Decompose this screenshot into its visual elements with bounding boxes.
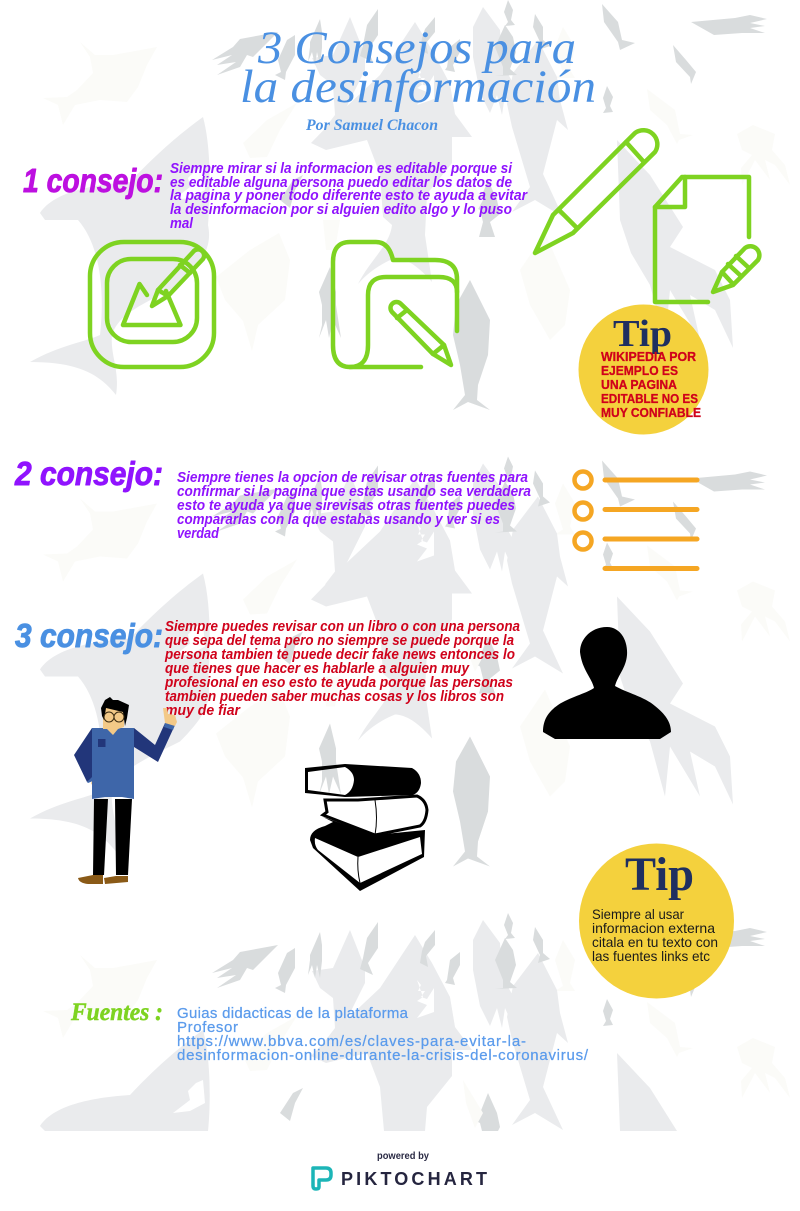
callout: tip Wikipedia: EJEMPLO ES — [601, 363, 678, 378]
text block: consejo 3: que sepa del tema pero no siempre se puede porque la — [165, 632, 514, 649]
icon: document with pencil — [655, 177, 759, 302]
icon: folder with pencil — [333, 242, 457, 367]
text block: sources: Guias didacticas de la plataforma — [177, 1005, 409, 1022]
text block: consejo 2 — [177, 469, 531, 542]
text block: sources: https://www.bbva.com/es/claves-para-evitar-la- — [177, 1033, 526, 1050]
text block: consejo 2: confirmar si la pagina que estas usando sea verdadera — [177, 483, 531, 500]
footer: powered by Piktochart — [313, 1151, 487, 1189]
text block: consejo 3: Siempre puedes revisar con un libro o con una persona — [165, 618, 520, 635]
text block: consejo 2: compararlas con la que estabas usando y ver si es — [177, 511, 500, 528]
footer: powered by Piktochart: PIKTOCHART — [341, 1169, 487, 1189]
title: la desinformación — [240, 61, 596, 113]
text block: consejo 1: es editable alguna persona puedo editar los datos de — [170, 174, 512, 191]
text block: consejo 2: esto te ayuda ya que sirevisas otras fuentes puedes — [177, 497, 515, 514]
callout: tip citation: Tip — [625, 848, 694, 901]
icon: stack of books — [305, 764, 427, 891]
callout: tip Wikipedia: MUY CONFIABLE — [601, 405, 701, 420]
icon: large pencil — [535, 130, 657, 253]
icon: person silhouette — [543, 627, 671, 739]
callout: tip citation: informacion externa — [592, 920, 715, 936]
heading: 1 consejo: 1 consejo: — [23, 162, 163, 199]
heading: Fuentes: Fuentes : — [70, 999, 163, 1026]
callout: tip Wikipedia: EDITABLE NO ES — [601, 391, 698, 406]
text block: consejo 1 — [170, 160, 528, 232]
text block: consejo 1: Siempre mirar si la informacion es editable porque si — [170, 160, 513, 177]
callout: tip Wikipedia — [578, 304, 708, 434]
text block: consejo 2: Siempre tienes la opcion de revisar otras fuentes para — [177, 469, 528, 486]
callout: tip citation: las fuentes links etc — [592, 948, 710, 964]
text block: consejo 3: tambien pueden saber muchas cosas y los libros son — [165, 688, 504, 705]
callout: tip citation — [579, 844, 734, 998]
text block: sources: desinformacion-online-durante-la-crisis-del-coronavirus/ — [177, 1047, 589, 1064]
title: 3 Consejos para — [257, 22, 576, 74]
text block: sources: Profesor — [177, 1019, 238, 1036]
callout: tip Wikipedia: WIKIPEDIA POR — [601, 349, 697, 364]
illustration: man pointing up — [74, 697, 177, 884]
subtitle: author: Por Samuel Chacon — [305, 117, 438, 134]
footer: powered by Piktochart: powered by — [377, 1151, 429, 1162]
text block: consejo 3: profesional en eso esto te ayuda porque las personas — [164, 674, 513, 691]
callout: tip citation: citala en tu texto con — [592, 934, 718, 950]
icon: edit square — [90, 242, 214, 367]
text block: consejo 1: mal — [170, 215, 194, 232]
callout: tip citation: Siempre al usar — [592, 906, 684, 922]
text block: sources — [177, 1005, 589, 1064]
callout: tip Wikipedia: Tip — [613, 313, 672, 355]
text block: consejo 3: que tienes que hacer es hablarle a alguien muy — [165, 660, 470, 677]
text block: consejo 3: persona tambien te puede decir fake news entonces lo — [164, 646, 515, 663]
title — [240, 22, 596, 113]
icon: checklist — [574, 472, 697, 568]
text block: consejo 3 — [164, 618, 520, 719]
callout: tip Wikipedia: UNA PAGINA — [601, 377, 678, 392]
text block: consejo 1: la pagina y poner todo diferente esto te ayuda a evitar — [170, 187, 528, 204]
text block: consejo 3: muy de fiar — [165, 702, 241, 719]
heading: 3 consejo: 3 consejo: — [15, 617, 163, 654]
text block: consejo 1: la desinformacion por si alguien edito algo y lo puso — [170, 201, 512, 218]
text block: consejo 2: verdad — [177, 525, 220, 542]
heading: 2 consejo: 2 consejo: — [14, 455, 163, 492]
